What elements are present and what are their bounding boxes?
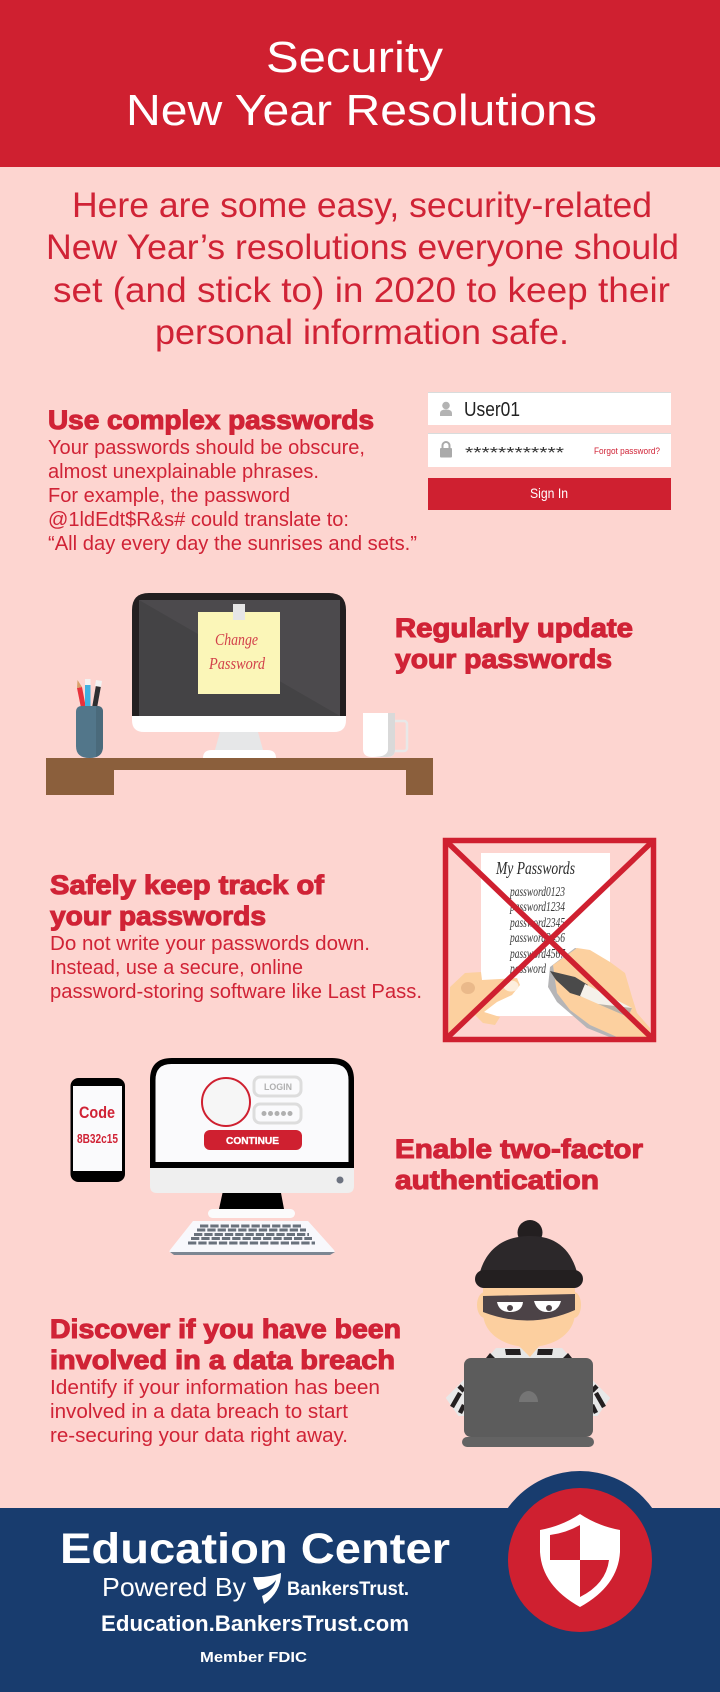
title: New Year Resolutions [126, 86, 597, 135]
paper [481, 853, 610, 1016]
login form [428, 392, 671, 510]
beanie [475, 1220, 583, 1288]
text block: keep track: password-storing software like Last Pass. [50, 981, 422, 1003]
bankers trust wordmark: BankersTrust. [287, 1579, 409, 1600]
footer panel [0, 1471, 720, 1692]
powered by: Powered By [102, 1572, 246, 1602]
heading: two-factor: Enable two-factor [395, 1134, 643, 1164]
keyboard [169, 1221, 335, 1255]
paper: password [509, 962, 547, 977]
text block: keep track: Do not write your passwords down. [50, 933, 370, 955]
monitor [132, 593, 346, 758]
login form: User01 [464, 399, 520, 421]
heading: data breach [50, 1314, 401, 1375]
title [126, 33, 597, 135]
right hand with pen [548, 948, 650, 1038]
laptop [462, 1358, 594, 1447]
url: Education.BankersTrust.com [101, 1611, 409, 1636]
sticky note [198, 604, 280, 694]
paper: password1234 [509, 900, 565, 915]
footer heading: Education Center [60, 1525, 450, 1573]
intro text: Here are some easy, security-related [72, 186, 652, 225]
intro text: New Year’s resolutions everyone should [46, 228, 679, 267]
illustration: desk with monitor [46, 593, 433, 795]
heading: regularly update: your passwords [395, 644, 612, 674]
intro text [46, 186, 679, 352]
text block: complex passwords: “All day every day the sunrises and sets.” [48, 533, 417, 555]
text block: data breach: Identify if your information has been [50, 1377, 380, 1399]
text block: data breach: involved in a data breach to start [50, 1401, 348, 1423]
illustration: crossed out password list [446, 840, 654, 1040]
member fdic: Member FDIC [200, 1649, 307, 1666]
password field [254, 1104, 301, 1123]
left hand [448, 972, 520, 1033]
heading: use complex passwords: Use complex passwords [48, 405, 374, 435]
login form: ************ [465, 445, 564, 462]
login form: Forgot password? [594, 446, 660, 456]
illustration: desktop login [150, 1058, 354, 1255]
heading: data breach: Discover if you have been [50, 1314, 401, 1344]
text block: keep track: Instead, use a secure, online [50, 957, 303, 979]
paper: password2345 [509, 916, 565, 931]
illustration: phone with code: Code [79, 1103, 115, 1122]
text block: data breach: re-securing your data right away. [50, 1425, 348, 1447]
arms [447, 1379, 609, 1415]
text block: keep track [50, 933, 422, 1003]
heading: two-factor [395, 1134, 643, 1195]
desk [46, 758, 433, 795]
icon: padlock [440, 442, 452, 458]
text block: data breach [50, 1377, 380, 1447]
title: Security [266, 33, 443, 82]
mask [483, 1294, 575, 1321]
illustration: phone with code: 8B32c15 [77, 1132, 118, 1146]
heading: data breach: involved in a data breach [50, 1345, 395, 1375]
red cross frame [446, 840, 654, 1040]
text block: complex passwords: almost unexplainable phrases. [48, 461, 319, 483]
sign in button [428, 478, 671, 510]
heading: safely keep track: Safely keep track of [50, 870, 324, 900]
heading: two-factor: authentication [395, 1165, 599, 1195]
sticky note: Change [215, 630, 258, 649]
intro text: set (and stick to) in 2020 to keep their [53, 271, 670, 310]
continue button [204, 1130, 302, 1150]
heading: regularly update: Regularly update [395, 613, 633, 643]
text block: complex passwords: @1ldEdt$R&s# could translate to: [48, 509, 349, 531]
paper: password4567 [509, 947, 566, 962]
torso stripes [486, 1348, 572, 1358]
continue button: CONTINUE [226, 1136, 279, 1147]
mug [363, 713, 407, 757]
icon: shield badge [508, 1488, 652, 1632]
text block: complex passwords: For example, the password [48, 485, 290, 507]
intro text: personal information safe. [155, 313, 569, 352]
illustration: phone with code [70, 1078, 125, 1182]
icon: user [440, 402, 452, 416]
login field: LOGIN [264, 1082, 292, 1092]
text block: complex passwords: Your passwords should be obscure, [48, 437, 365, 459]
sign in button: Sign In [530, 485, 568, 501]
text block: complex passwords [48, 437, 417, 555]
heading: safely keep track [50, 870, 324, 931]
icon: bankers trust logo [253, 1573, 281, 1604]
header banner [0, 0, 720, 167]
paper: My Passwords [495, 858, 575, 878]
pencil cup [76, 679, 103, 758]
head [477, 1285, 581, 1357]
illustration: thief at laptop [447, 1220, 609, 1447]
heading: safely keep track: your passwords [50, 901, 266, 931]
paper: password0123 [509, 885, 565, 900]
paper: password3456 [509, 931, 565, 946]
login field [254, 1077, 301, 1096]
heading: regularly update [395, 613, 633, 674]
sticky note: Password [208, 654, 265, 673]
